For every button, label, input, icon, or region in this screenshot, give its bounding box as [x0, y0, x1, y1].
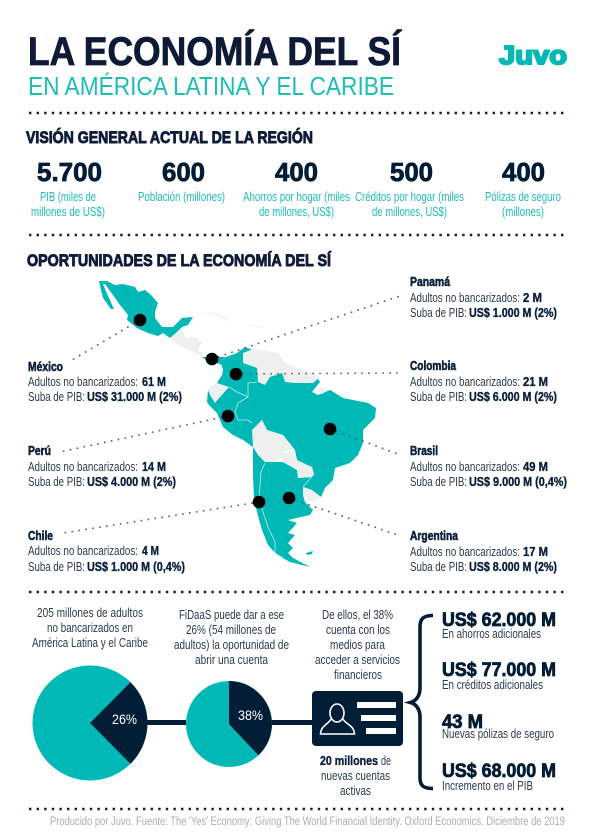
benefit: ahorros: En ahorros adicionales	[442, 627, 541, 641]
callout: Perú: US$ 4.000 M (2%)	[87, 475, 176, 489]
callout: Colombia: Colombia	[410, 359, 457, 373]
callout: Colombia: US$ 6.000 M (2%)	[469, 390, 557, 404]
pie chart: 26%	[32, 666, 148, 780]
logo: Juvo: Juvo	[499, 40, 567, 70]
callout: Colombia: Adultos no bancarizados:	[410, 375, 520, 389]
benefit: pólizas	[442, 711, 554, 741]
connector bars between charts	[146, 720, 312, 725]
benefit: ahorros: US$ 62.000 M	[442, 609, 556, 631]
callout: México: US$ 31.000 M (2%)	[87, 390, 182, 404]
text: 205 millones: 205 millones de adultos	[37, 606, 143, 620]
callout: Panamá: Panamá	[410, 275, 450, 289]
callout: Chile	[28, 529, 185, 574]
text: 20 millones: activas	[340, 784, 371, 798]
stat: población: 600	[162, 157, 205, 187]
callout: Perú	[28, 444, 176, 489]
callout: Argentina: US$ 8.000 M (2%)	[469, 560, 557, 574]
callout: México	[28, 360, 182, 404]
callout: Panamá: US$ 1.000 M (2%)	[469, 306, 557, 320]
map: Colombia, Brazil and Peru	[207, 347, 376, 497]
callout: Panamá: 2 M	[523, 291, 542, 305]
callout: Perú: Perú	[28, 444, 51, 458]
map: Mexico	[99, 281, 193, 338]
text: FiDaaS	[174, 608, 289, 667]
callout: Perú: Suba de PIB:	[28, 475, 85, 489]
connector: México	[72, 320, 140, 360]
connector: Perú	[60, 416, 228, 452]
callout: Brasil: Adultos no bancarizados:	[410, 460, 520, 474]
icon: ID card	[312, 691, 403, 746]
callout: Panamá: Adultos no bancarizados:	[410, 291, 520, 305]
stat: PIB: millones de US$)	[31, 205, 105, 219]
text: De ellos, el 38%	[315, 608, 400, 682]
pie chart: 38%: 38%	[238, 708, 263, 723]
callout: México: Adultos no bancarizados:	[28, 375, 138, 389]
stats row: regional overview	[31, 157, 561, 219]
text: 205 millones: América Latina y el Caribe	[32, 636, 148, 650]
stat: créditos: 500	[390, 157, 433, 187]
brace	[410, 616, 433, 788]
connector: Chile	[63, 502, 259, 533]
callout: Brasil: 49 M	[523, 460, 548, 474]
text: FiDaaS: 26% (54 millones de	[186, 623, 276, 637]
benefit: pólizas: 43 M	[442, 711, 483, 733]
map: country borders	[229, 382, 314, 558]
callout: Argentina: Adultos no bancarizados:	[410, 545, 520, 559]
stat: créditos: Créditos por hogar (miles	[355, 190, 464, 204]
text: De ellos, el 38%: cuenta con los	[326, 623, 390, 637]
text: FiDaaS: FiDaaS puede dar a ese	[179, 608, 284, 622]
text: 205 millones: no bancarizados en	[47, 621, 133, 635]
title: LA ECONOMÍA DEL SÍ	[28, 29, 402, 74]
benefit: créditos: US$ 77.000 M	[442, 659, 556, 681]
stat: ahorros: 400	[275, 157, 318, 187]
stat: ahorros: de millones, US$)	[259, 205, 334, 219]
callout: Perú: 14 M	[142, 460, 166, 474]
stat: pólizas	[485, 157, 561, 219]
text: FiDaaS: adultos) la oportunidad de	[174, 638, 289, 652]
stat: ahorros: Ahorros por hogar (miles	[243, 190, 350, 204]
stat: pólizas: Pólizas de seguro	[485, 190, 561, 204]
benefit: PIB: US$ 68.000 M	[442, 760, 556, 782]
pie chart: 38%	[186, 681, 272, 767]
text: 20 millones	[320, 754, 391, 798]
text: 20 millones: de	[381, 754, 391, 768]
callout: Colombia: 21 M	[523, 375, 548, 389]
callout: Brasil: US$ 9.000 M (0,4%)	[469, 475, 567, 489]
callout: Chile: Chile	[28, 529, 53, 543]
pie chart: 26%: 26%	[112, 712, 137, 727]
title: EN AMÉRICA LATINA Y EL CARIBE	[28, 71, 394, 101]
heading: visión general: VISIÓN GENERAL ACTUAL DE LA REGIÓN	[26, 128, 313, 147]
text: FiDaaS: abrir una cuenta	[195, 653, 268, 667]
callout: Argentina: Suba de PIB:	[410, 560, 467, 574]
text: 205 millones	[32, 606, 148, 650]
stat: PIB: PIB (miles de	[40, 190, 96, 204]
callout: Argentina: Argentina	[410, 529, 459, 543]
callout: Chile: US$ 1.000 M (0,4%)	[87, 560, 185, 574]
callout: México: México	[28, 360, 63, 374]
stat: PIB: 5.700	[37, 157, 102, 187]
text: 20 millones: nuevas cuentas	[321, 769, 390, 783]
text: De ellos, el 38%: acceder a servicios	[315, 653, 400, 667]
stat: pólizas: (millones)	[502, 205, 544, 219]
callout: México: Suba de PIB:	[28, 390, 85, 404]
title	[28, 29, 402, 101]
text: De ellos, el 38%: De ellos, el 38%	[322, 608, 393, 622]
stat: población	[138, 157, 225, 204]
stat: ahorros	[243, 157, 350, 219]
callout: Brasil: Suba de PIB:	[410, 475, 467, 489]
callout: México: 61 M	[142, 375, 166, 389]
stat: pólizas: 400	[502, 157, 545, 187]
benefit: PIB: Incremento en el PIB	[442, 779, 533, 793]
map: Chile and Argentina	[253, 447, 314, 567]
callout: Panamá	[410, 275, 557, 320]
benefit: créditos	[442, 659, 556, 692]
benefit: ahorros	[442, 609, 556, 641]
map: Falkland Islands	[306, 551, 313, 555]
stat: población: Población (millones)	[138, 190, 225, 204]
callout: Panamá: Suba de PIB:	[410, 306, 467, 320]
stat: PIB	[31, 157, 105, 219]
benefit: PIB	[442, 760, 556, 793]
callout: Brasil: Brasil	[410, 444, 438, 458]
stat: créditos: de millones, US$)	[372, 205, 447, 219]
callout: Perú: Adultos no bancarizados:	[28, 460, 138, 474]
callout: Brasil	[410, 444, 567, 489]
callout: Chile: Adultos no bancarizados:	[28, 544, 138, 558]
map: Panama	[202, 357, 224, 365]
connector: Argentina	[289, 498, 398, 535]
connector: Panamá	[212, 296, 400, 359]
text: De ellos, el 38%: financieros	[334, 668, 382, 682]
map: Latin America and the Caribbean	[99, 281, 376, 567]
callout: Colombia: Suba de PIB:	[410, 390, 467, 404]
benefit: pólizas: Nuevas pólizas de seguro	[442, 727, 554, 741]
callout: Argentina	[410, 529, 557, 574]
text: De ellos, el 38%: medios para	[330, 638, 385, 652]
callout: Colombia	[410, 359, 557, 404]
callout: Chile: Suba de PIB:	[28, 560, 85, 574]
connector: Colombia	[236, 373, 400, 374]
callout: Chile: 4 M	[142, 544, 159, 558]
connector: Brasil	[330, 429, 398, 454]
benefit: créditos: En créditos adicionales	[442, 678, 543, 692]
map markers	[134, 314, 336, 508]
map: grey non-highlighted countries	[170, 312, 327, 502]
heading: oportunidades: OPORTUNIDADES DE LA ECONOMÍA DEL SÍ	[27, 251, 332, 270]
stat: créditos	[355, 157, 464, 219]
callout: Argentina: 17 M	[523, 545, 548, 559]
text: 20 millones: 20 millones	[320, 754, 378, 768]
